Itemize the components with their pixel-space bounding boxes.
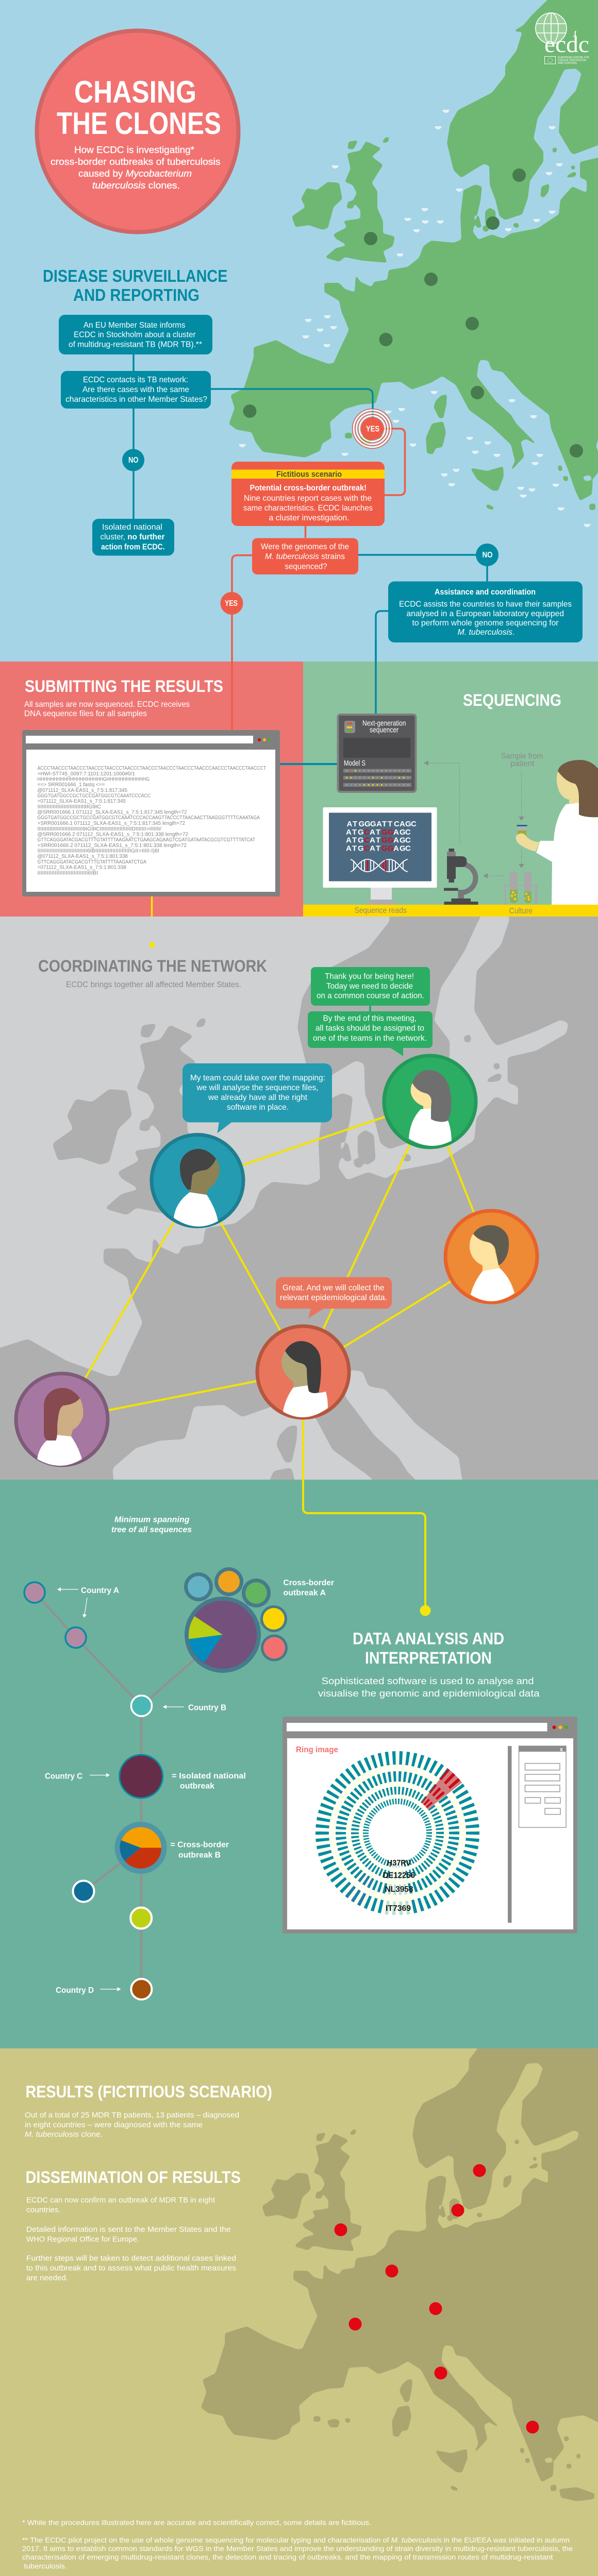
section background: blue surveillance — [0, 0, 598, 662]
sequence text — [37, 765, 266, 876]
heading and text: results — [25, 2082, 272, 2139]
arrowheads — [424, 760, 524, 878]
ecdc logo — [536, 13, 589, 65]
title: caused by Mycobacterium — [78, 168, 192, 179]
tree labels and arrows: = Isolated national — [172, 1772, 246, 1781]
browser window with ring image — [283, 1717, 577, 1934]
label bar: sequence reads, culture: Sequence reads — [355, 906, 407, 915]
flow box: assistance and coordination: to perform whole genome sequencing for — [412, 619, 559, 628]
flow box: isolated national cluster: Isolated national — [102, 523, 162, 532]
sequence rows with mutations: ATGGGATTCAGC — [346, 820, 417, 828]
speech bubble: blue: we already have all the right — [208, 1093, 308, 1102]
heading: data analysis and interpretation — [318, 1629, 540, 1699]
sequencer machine: Next-generation — [362, 719, 406, 727]
sequence text: +SRR001666.2 071112_SLXA-EAS1_s_7:5:1:801:338 length=72 — [37, 842, 187, 849]
panel: results — [0, 2048, 598, 2576]
heading: submitting the results: DNA sequence files for all samples — [24, 709, 147, 718]
speech bubbles: green: one of the teams in the network. — [313, 1034, 427, 1043]
panel: data analysis — [0, 1480, 598, 2048]
label: sample from patient — [501, 752, 543, 768]
badge: yes with rings: YES — [366, 425, 379, 434]
scientist illustration — [516, 760, 598, 905]
tree labels and arrows: outbreak — [180, 1782, 214, 1791]
speech bubbles: green: Today we need to decide — [326, 982, 413, 991]
sequencer machine — [338, 715, 416, 792]
sequence rows with mutations: ATGCATGGAGC — [346, 836, 411, 845]
speech bubbles: green — [308, 967, 433, 1056]
speech bubble: blue: software in place. — [227, 1103, 289, 1112]
heading and text: dissemination: to this outbreak and to assess what public health measures — [26, 2264, 236, 2273]
flow box: assistance and coordination: M. tuberculosis. — [458, 628, 514, 637]
speech bubble: blue — [182, 1063, 332, 1133]
title: THE CLONES — [57, 106, 221, 141]
footnotes — [22, 2518, 573, 2576]
footnotes: 2017. It aims to establish common standards for WGS in the Member States and improve the understanding of strain diversity in multidrug-resistant tuberculosis, the — [22, 2544, 573, 2552]
heading and text: dissemination: are needed. — [26, 2274, 68, 2282]
tree labels and arrows: Country B — [188, 1703, 226, 1713]
speech bubble: blue: we will analyse the sequence files, — [196, 1083, 319, 1092]
sequence text: GTTCAGGGATACGACGTTTGTATTTTAAGAATCTGAAGCAGAAGTCGATGATAATACGCGTCGTTTTATCAT — [37, 837, 255, 843]
footnotes: characterisation of emerging multidrug-resistant clones, the detection and tracing of outbreaks, and the mapping of transmission routes of multidrug-resistant — [22, 2553, 553, 2561]
label: sample from patient: patient — [510, 759, 535, 768]
badge: no second — [476, 544, 499, 566]
heading and text: results: in eight countries – were diagnosed with the same — [25, 2121, 203, 2129]
tree labels and arrows: Country C — [45, 1772, 82, 1781]
flow box: genomes sequenced question: sequenced? — [285, 563, 327, 571]
outbreak A satellites — [184, 1567, 288, 1661]
test tubes culture — [504, 872, 538, 905]
title: CHASING — [74, 75, 196, 109]
minimum spanning tree — [24, 1567, 288, 1999]
tree labels and arrows: outbreak A — [284, 1589, 326, 1597]
map: Europe green — [229, 0, 598, 520]
heading: data analysis and interpretation: Sophisticated software is used to analyse and — [322, 1675, 534, 1686]
ring chart: IT7369 — [386, 1904, 411, 1913]
flow box: member state informs: ECDC in Stockholm about a cluster — [74, 331, 196, 339]
panel: coordinating the network — [0, 917, 598, 1480]
flow box: assistance and coordination — [388, 581, 583, 642]
node: country A — [24, 1582, 86, 1648]
node: country B — [131, 1696, 152, 1716]
title — [51, 75, 221, 191]
heading: submitting the results: All samples are now sequenced. ECDC receives — [24, 700, 190, 709]
heading: coordinating the network: COORDINATING THE NETWORK — [38, 957, 267, 975]
tree end nodes — [73, 1880, 152, 1999]
sequence text: +071112_SLXA-EAS1_s_7:5:1:801:338 — [37, 865, 126, 871]
sequence text: GTTCAGGGATACGACGTTTGTATTTTAAGAATCTGA — [37, 859, 146, 865]
footnotes: ** The ECDC pilot project on the use of whole genome sequencing for molecular typing and characterisation of M. tuberculosis in the EU/EEA was initiated in autumn — [22, 2536, 570, 2544]
flow box: isolated national cluster: action from ECDC. — [101, 543, 165, 551]
title circle — [37, 31, 238, 232]
heading: coordinating the network — [38, 957, 267, 989]
heading: data analysis and interpretation: visualise the genomic and epidemiological data — [318, 1688, 540, 1699]
panel: sequencing — [303, 662, 598, 917]
heading and text: dissemination: DISSEMINATION OF RESULTS — [26, 2168, 241, 2187]
speech bubble: red: relevant epidemiological data. — [280, 1293, 387, 1302]
ring chart — [322, 1758, 473, 1915]
heading and text: dissemination: Detailed information is sent to the Member States and the — [26, 2225, 231, 2234]
sequence text: IIIIIIIIIIIIIIIIIIIIIIIIIIIIIIII6IBIIIIIIIIIIIIIIIIIIIIIIIGII>IIIII-I)8I — [37, 848, 159, 854]
monitor with sequence reads — [323, 807, 437, 905]
speech bubbles: green: By the end of this meeting, — [323, 1014, 417, 1023]
sequence text: +SRR001666.1 071112_SLXA-EAS1_s_7:5:1:817:345 length=72 — [37, 820, 185, 826]
badge: yes second — [221, 592, 243, 615]
heading and text: dissemination: ECDC can now confirm an outbreak of MDR TB in eight — [26, 2196, 215, 2205]
sequence rows with mutations — [346, 820, 417, 853]
fictitious scenario box: Fictitious scenario — [276, 470, 342, 479]
browser window with ring image: Ring image — [296, 1745, 338, 1754]
heading and text: results: RESULTS (FICTITIOUS SCENARIO) — [26, 2082, 272, 2101]
flow box: isolated national cluster — [92, 519, 174, 555]
label bar: sequence reads, culture: Culture — [509, 907, 533, 916]
heading: submitting the results: SUBMITTING THE RESULTS — [25, 677, 223, 696]
red outbreak dots — [334, 2164, 539, 2434]
caption: minimum spanning tree — [111, 1516, 192, 1534]
connector lines in flowchart — [134, 354, 487, 714]
outbreak A pie — [185, 1597, 261, 1673]
heading and text: results: Out of a total of 25 MDR TB patients, 13 patients – diagnosed — [25, 2111, 239, 2120]
heading and text: dissemination: Further steps will be taken to detect additional cases linked — [26, 2254, 236, 2263]
heading: disease surveillance and reporting: DISEASE SURVEILLANCE — [43, 266, 228, 285]
dialog panel — [519, 1746, 566, 1827]
title: cross-border outbreaks of tuberculosis — [51, 156, 221, 167]
badge: yes with rings — [353, 409, 392, 448]
connectors over panels — [152, 555, 376, 945]
ring chart: NL3958 — [385, 1885, 413, 1894]
outbreak B pie — [114, 1822, 167, 1874]
flow box: assistance and coordination: ECDC assists the countries to have their samples — [399, 600, 572, 609]
ecdc logo: ecdc — [544, 31, 589, 57]
scrollbar — [508, 1746, 511, 1923]
dialog panel: x — [560, 1747, 563, 1753]
heading: sequencing: SEQUENCING — [463, 691, 561, 709]
heading and text: results: M. tuberculosis clone. — [25, 2130, 103, 2139]
fictitious scenario box: Nine countries report cases with the — [244, 494, 372, 503]
browser window with sequence file — [22, 730, 280, 896]
heading and text: dissemination: WHO Regional Office for Europe. — [26, 2235, 139, 2244]
node: country C — [120, 1755, 163, 1798]
speech bubbles: green: all tasks should be assigned to — [315, 1024, 424, 1032]
speech bubble: red — [276, 1277, 392, 1318]
flow box: genomes sequenced question: Were the genomes of the — [261, 543, 349, 551]
map: Europe khaki — [201, 2048, 598, 2501]
footnotes: * While the procedures illustrated here are accurate and scientifically correct, some details are fictitious. — [22, 2518, 371, 2527]
sequence text: ACCCTAACCCTAACCCTAACCCTAACCCTAACCCTAACCCTAACCCTAACCCTAACCCAACCCTAACCCTAACCCT — [37, 765, 266, 771]
ecdc logo: EUROPEAN CENTRE FOR — [558, 56, 589, 59]
flow box: ecdc contacts network: characteristics in other Member States? — [65, 395, 207, 404]
tree labels and arrows — [45, 1579, 334, 1995]
microscope — [444, 849, 478, 905]
fictitious scenario box: same characteristics. ECDC launches — [243, 504, 373, 513]
fictitious scenario box: a cluster investigation. — [269, 514, 350, 522]
tree labels and arrows: = Cross-border — [170, 1840, 229, 1850]
tree labels and arrows: Country D — [56, 1986, 94, 1995]
badge: yes second: YES — [225, 599, 238, 608]
ecdc logo: DISEASE PREVENTION — [558, 59, 586, 62]
tree labels and arrows: outbreak B — [178, 1851, 221, 1860]
ring chart: H37RV — [387, 1859, 411, 1868]
sequence text: @SRR001666.2 071112_SLXA-EAS1_s_7:5:1:801:338 length=72 — [37, 832, 188, 838]
yellow network lines — [62, 1101, 491, 1480]
fictitious scenario box — [231, 462, 385, 526]
sequence rows with mutations: ATGCATGGAGC — [346, 844, 411, 853]
person: purple — [16, 1374, 108, 1466]
flow box: member state informs: An EU Member State informs — [84, 321, 186, 330]
heading: coordinating the network: ECDC brings together all affected Member States. — [66, 980, 241, 989]
sequence text: IIIIIIIIIIIIIIIIIIIIIIIIIIIIIIII6IBI — [37, 870, 98, 876]
heading: disease surveillance and reporting: AND REPORTING — [73, 285, 200, 304]
sequence text: @071112_SLXA-EAS1_s_7:5:1:817:345 — [37, 787, 127, 793]
sequence text: +HWI-ST745_0097:7:1101:1201:1000#0/1 — [37, 771, 135, 777]
waves on sea — [239, 110, 591, 527]
panel: submitting the results — [0, 662, 303, 917]
flow box: genomes sequenced question — [252, 538, 358, 574]
flow box: assistance and coordination: Assistance and coordination — [435, 588, 536, 597]
badge: no: NO — [128, 456, 138, 465]
person: orange — [445, 1211, 537, 1302]
speech bubbles: green: on a common course of action. — [317, 991, 424, 1001]
yellow dot data analysis — [420, 1605, 431, 1616]
badge: no second: NO — [483, 551, 493, 560]
heading and text: dissemination: countries. — [26, 2206, 61, 2214]
tree labels and arrows: Country A — [81, 1586, 119, 1595]
sequence text: ==> SRR001666_1.fastq <== — [37, 782, 105, 788]
sequence text: IIIIIIIIIIIIIIIIIIIIIIIIIIIIII9IG9IC — [37, 804, 101, 810]
ecdc logo: AND CONTROL — [558, 62, 577, 65]
flow box: ecdc contacts network — [61, 371, 211, 409]
flow box: assistance and coordination: analysed in a European laboratory equipped — [406, 609, 564, 618]
caption: minimum spanning tree: tree of all sequences — [111, 1526, 192, 1534]
flow box: isolated national cluster: cluster, no further — [100, 533, 165, 541]
heading: disease surveillance and reporting — [43, 266, 228, 304]
speech bubble: blue: My team could take over the mapping: — [190, 1074, 325, 1082]
flow box: ecdc contacts network: ECDC contacts its TB network: — [83, 376, 188, 384]
title: How ECDC is investigating* — [74, 144, 194, 155]
sequence text: IIIIIIIIIIIIIIIIIIIIIIIIIIIIII9IG9ICIIIIIIIIIIIIIIIIIIIIIDIIIIIII>IIIIIII/ — [37, 826, 161, 832]
dotted process arrows — [429, 763, 522, 876]
yellow line continuing — [303, 1480, 425, 1611]
flow box: genomes sequenced question: M. tuberculosis strains — [265, 552, 345, 561]
sequence text: +071112_SLXA-EAS1_s_7:5:1:817:345 — [37, 798, 126, 804]
flow box: ecdc contacts network: Are there cases with the same — [82, 385, 189, 394]
sequencer machine: Model S — [344, 759, 366, 768]
footnotes: tuberculosis. — [24, 2562, 67, 2570]
label: sample from patient: Sample from — [501, 752, 543, 760]
person: green — [384, 1056, 476, 1147]
yellow dot top — [149, 942, 155, 948]
sequence rows with mutations: ATGCATGGAGC — [346, 828, 411, 837]
heading and text: dissemination — [26, 2168, 241, 2282]
capital dots on map — [243, 168, 583, 457]
heading: data analysis and interpretation: INTERPRETATION — [365, 1649, 492, 1667]
ring chart: DE12256 — [383, 1871, 415, 1880]
flow box: member state informs: of multidrug-resistant TB (MDR TB).** — [69, 340, 202, 349]
heading: submitting the results — [24, 677, 223, 718]
person: red — [257, 1326, 349, 1418]
heading: data analysis and interpretation: DATA ANALYSIS AND — [353, 1629, 504, 1648]
fictitious scenario box: Potential cross-border outbreak! — [250, 484, 367, 493]
flow box: member state informs — [59, 315, 212, 354]
sequencer machine: sequencer — [370, 725, 398, 735]
person: blue — [152, 1134, 243, 1227]
map: Europe grey — [0, 917, 598, 1480]
tree labels and arrows: Cross-border — [284, 1579, 334, 1587]
sequence text: @071112_SLXA-EAS1_s_7:5:1:801:338 — [37, 853, 128, 859]
speech bubble: red: Great. And we will collect the — [283, 1284, 385, 1292]
caption: minimum spanning tree: Minimum spanning — [114, 1516, 190, 1524]
badge: no — [122, 449, 144, 471]
sequence text: @SRR001666.1 071112_SLXA-EAS1_s_7:5:1:817:345 length=72 — [37, 809, 187, 815]
speech bubbles: green: Thank you for being here! — [325, 972, 414, 981]
sequence text: GGGTGATGGCCGCTGCCGATGGCGTCAAATCCCACC — [37, 792, 151, 799]
title: tuberculosis clones. — [92, 180, 180, 191]
label bar: sequence reads, culture — [303, 905, 598, 917]
sequence text: HHHHHHHHHHHHHHHHHHHHGHHHHHHHHHHHHG — [37, 776, 150, 782]
dna helix — [351, 859, 408, 872]
sequence text: GGGTGATGGCCGCTGCCGATGGCGTCAAATCCCACCAAGTTACCCTTAACAACTTAAGGGTTTTCAAATAGA — [37, 815, 260, 821]
